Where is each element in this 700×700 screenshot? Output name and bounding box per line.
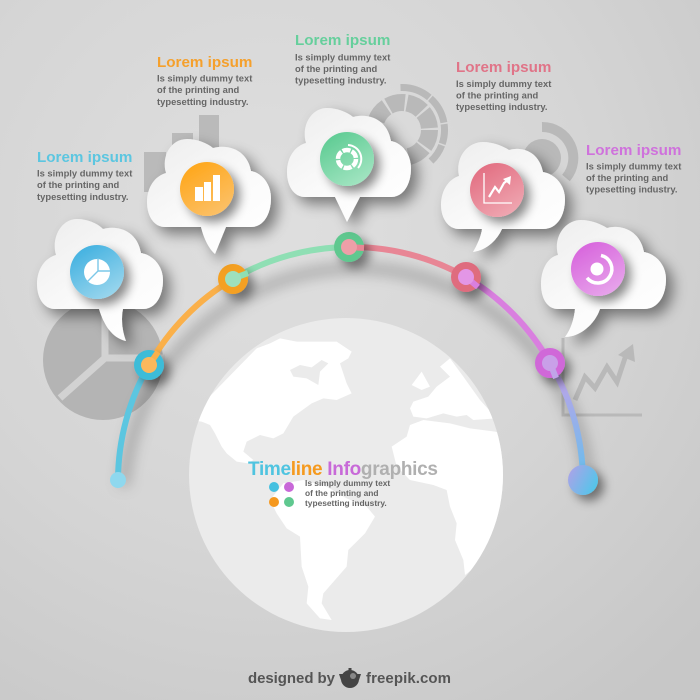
text block 1: of the printing and: [37, 179, 120, 190]
text block 5: Lorem ipsum: [586, 142, 681, 159]
cloud 1: pie: [37, 219, 163, 341]
text block 4: of the printing and: [456, 90, 539, 100]
text block 5: typesetting industry.: [586, 184, 678, 194]
center text block: typesetting industry.: [305, 498, 387, 508]
center text block: Is simply dummy text: [305, 478, 390, 488]
text block 4: Is simply dummy text: [456, 78, 551, 89]
text block 1: typesetting industry.: [37, 191, 129, 202]
timeline end dot: [568, 465, 598, 495]
icon: line chart: [484, 173, 512, 203]
globe: [187, 318, 513, 632]
button: red: [470, 163, 524, 217]
text block 3: [295, 32, 390, 86]
text block 2: [157, 54, 252, 107]
text block 3: typesetting industry.: [295, 74, 387, 86]
footer: credit: [248, 668, 451, 688]
text block 3: Is simply dummy text: [295, 52, 390, 62]
button: blue: [70, 245, 124, 299]
text block 1: [37, 149, 132, 202]
button: purple: [571, 242, 625, 296]
text block 2: of the printing and: [157, 84, 240, 95]
timeline arc: [118, 247, 583, 480]
text block 2: Lorem ipsum: [157, 54, 252, 71]
text block 5: Is simply dummy text: [586, 160, 681, 172]
europe: [410, 358, 497, 420]
icon: background concentric arc: [523, 127, 573, 178]
heading: timeline infographics: Timeline Infographics: [248, 459, 438, 480]
node 4: [451, 262, 481, 292]
cloud 4: line chart: [441, 142, 565, 252]
node 1: [134, 350, 164, 380]
icon: background bar chart: [144, 115, 219, 192]
text block 1: Is simply dummy text: [37, 168, 132, 178]
icon: bars: [195, 175, 220, 201]
timeline start dot: [110, 472, 126, 488]
legend dots: [269, 482, 294, 507]
icon: pie chart: [84, 258, 112, 285]
text block 4: Lorem ipsum: [456, 59, 551, 76]
node 2: [218, 264, 248, 294]
text block 1: Lorem ipsum: [37, 149, 132, 166]
icon: background segmented ring: [374, 87, 445, 161]
text block 4: [456, 59, 551, 112]
text block 4: typesetting industry.: [456, 101, 548, 112]
text block 5: [586, 142, 681, 194]
center text block: of the printing and: [305, 488, 379, 498]
british isles: [412, 372, 430, 390]
africa: [392, 420, 513, 575]
button: green: [320, 132, 374, 186]
text block 2: Is simply dummy text: [157, 72, 252, 84]
footer: credit: designed by: [248, 670, 336, 687]
icon: background pie chart: [43, 300, 165, 420]
icon: arc ring: [587, 255, 612, 283]
text block 3: Lorem ipsum: [295, 32, 390, 49]
icon: segmented ring: [338, 145, 361, 168]
node 3: [334, 232, 364, 262]
button: orange: [180, 162, 234, 216]
footer: credit: freepik.com: [366, 670, 451, 687]
arc shadow: [124, 268, 589, 486]
cloud 3: ring: [287, 108, 411, 222]
north america: [187, 338, 352, 463]
south america: [270, 480, 375, 620]
text block 5: of the printing and: [586, 172, 669, 183]
icon: background line chart: [563, 338, 642, 415]
cloud 2: bars: [147, 139, 271, 254]
icon: freepik: [339, 668, 361, 688]
text block 3: of the printing and: [295, 63, 378, 74]
cloud 5: arc ring: [541, 220, 666, 337]
text block 2: typesetting industry.: [157, 96, 249, 107]
node 5: [535, 348, 565, 378]
